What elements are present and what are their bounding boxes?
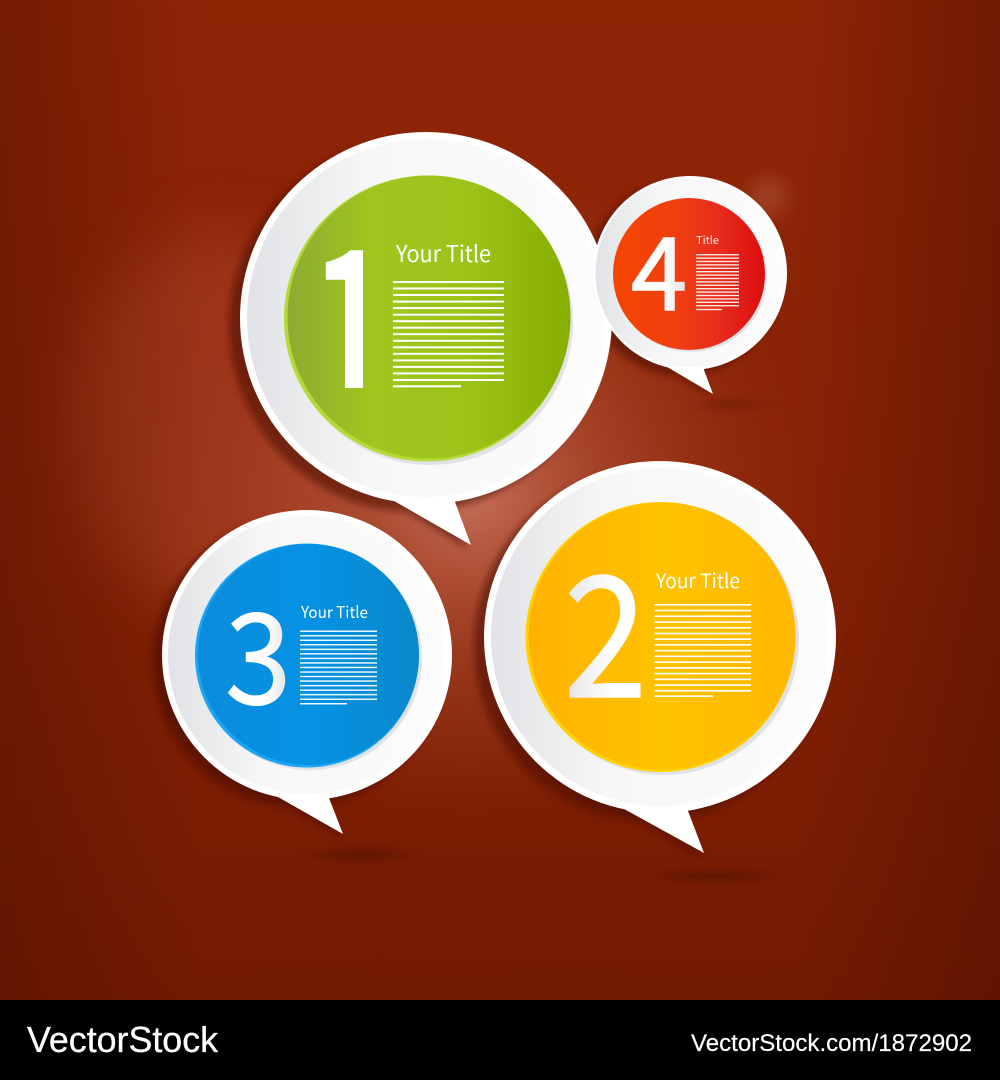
footer image id: VectorStock.com/1872902 bbox=[691, 1030, 972, 1057]
footer brand: VectorStock bbox=[27, 1019, 219, 1060]
bubble 4: red bbox=[593, 176, 787, 408]
red disc bbox=[613, 198, 765, 350]
number 1: 1 bbox=[310, 166, 395, 443]
number 3: 3 bbox=[225, 558, 291, 741]
number 4: 4 bbox=[631, 194, 687, 340]
text lines bbox=[300, 630, 377, 704]
blue disc bbox=[195, 544, 419, 768]
floor shadow bbox=[320, 850, 404, 860]
floor shadow bbox=[702, 402, 758, 408]
inner ring bbox=[596, 179, 784, 367]
disc edge bbox=[198, 546, 422, 770]
bubble body bbox=[484, 461, 836, 853]
green disc bbox=[284, 176, 570, 462]
inner ring bbox=[168, 516, 446, 794]
text lines bbox=[393, 281, 504, 387]
bubble body bbox=[593, 176, 787, 394]
inner ring bbox=[491, 468, 829, 806]
text lines bbox=[654, 604, 751, 697]
floor shadow bbox=[665, 871, 765, 881]
bubble shadow bbox=[474, 469, 826, 857]
bubble body bbox=[162, 510, 452, 834]
bubble shadow bbox=[229, 140, 601, 549]
bubble body bbox=[240, 132, 612, 545]
disc edge bbox=[287, 179, 573, 465]
bubble 4 shadow bbox=[585, 182, 779, 396]
text lines bbox=[696, 254, 739, 310]
title: Your Title bbox=[395, 235, 491, 269]
inner ring bbox=[247, 139, 605, 497]
title: Your Title bbox=[655, 565, 740, 594]
disc edge bbox=[615, 200, 767, 352]
title: Your Title bbox=[300, 599, 368, 623]
footer bar bbox=[0, 1000, 1000, 1080]
bubble 2: yellow bbox=[474, 461, 836, 881]
bubble shadow bbox=[153, 517, 443, 836]
title: Title bbox=[696, 232, 719, 248]
disc edge bbox=[529, 505, 799, 775]
bubble 1: green bbox=[229, 132, 612, 549]
bubble 3: blue bbox=[153, 510, 452, 860]
number 2: 2 bbox=[564, 504, 647, 746]
yellow disc bbox=[526, 502, 796, 772]
